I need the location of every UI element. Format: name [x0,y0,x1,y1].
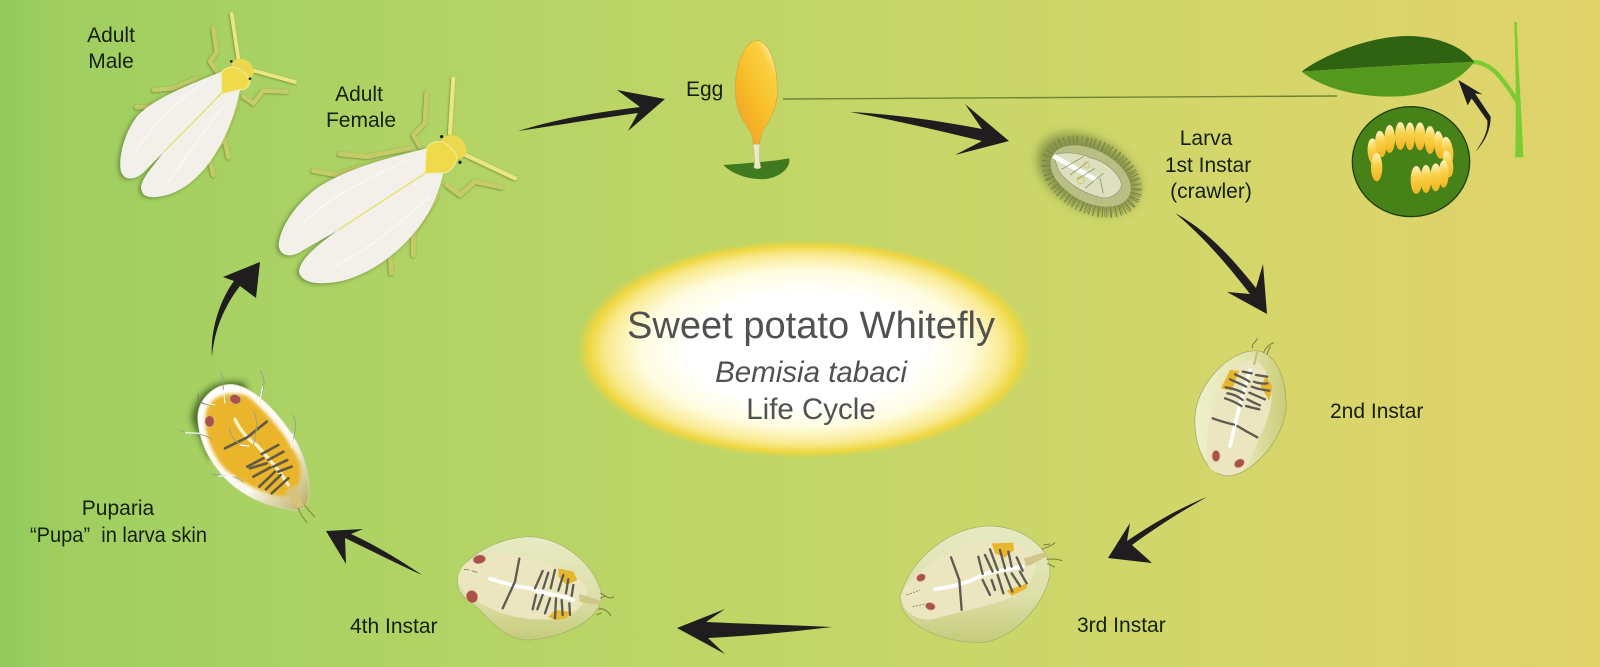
icon: third instar [900,526,1062,643]
arrow: second to third instar [1108,497,1207,563]
icon: puparia [180,371,315,523]
arrow: adult to egg [518,90,665,131]
label: Puparia "Pupa" in larva skin [30,497,207,547]
arrow: fourth instar to puparia [326,529,422,575]
subtitle: Life Cycle: Life Cycle [746,393,876,426]
label: Adult Male: Male [88,50,134,73]
label: 4th Instar: 4th Instar [350,615,438,638]
label: Puparia "Pupa" in larva skin: Puparia [82,497,155,520]
arrow: larva to second instar [1175,213,1267,314]
central title oval [577,240,1033,458]
arrow: third to fourth instar [677,609,832,654]
label: Larva 1st Instar (crawler): 1st Instar [1165,154,1251,177]
arrow: puparia to adult [212,262,260,357]
label: 2nd Instar: 2nd Instar [1330,400,1423,423]
line from egg to leaf [783,96,1337,99]
icon: second instar [1195,338,1286,476]
whitefly: adult male [120,14,295,197]
subtitle: Bemisia tabaci: Bemisia tabaci [715,356,908,389]
label: Puparia "Pupa" in larva skin: “Pupa” in larva skin [30,524,207,547]
icon: first instar larva [1023,117,1153,230]
whitefly: adult female [279,79,515,283]
label: Larva 1st Instar (crawler): (crawler) [1170,180,1252,203]
label: Egg: Egg [686,78,723,101]
label: Adult Female [326,83,396,132]
icon: egg cluster on leaf [1352,107,1470,217]
label: Adult Female: Female [326,109,396,132]
label: Adult Male: Adult [87,24,135,47]
label: Larva 1st Instar (crawler): Larva [1180,127,1233,150]
label: Larva 1st Instar (crawler) [1165,127,1252,203]
arrow: egg to larva [850,104,1009,155]
icon: egg on leaf [723,41,789,179]
title: Sweet potato Whitefly: Sweet potato Whitefly [627,305,995,347]
label: Adult Male [87,24,135,73]
icon: fourth instar [457,537,614,640]
arrow: eggs to leaf [1458,80,1491,152]
label: Adult Female: Adult [335,83,383,106]
icon: leaf with branch [1302,22,1523,157]
label: 3rd Instar: 3rd Instar [1077,614,1166,637]
